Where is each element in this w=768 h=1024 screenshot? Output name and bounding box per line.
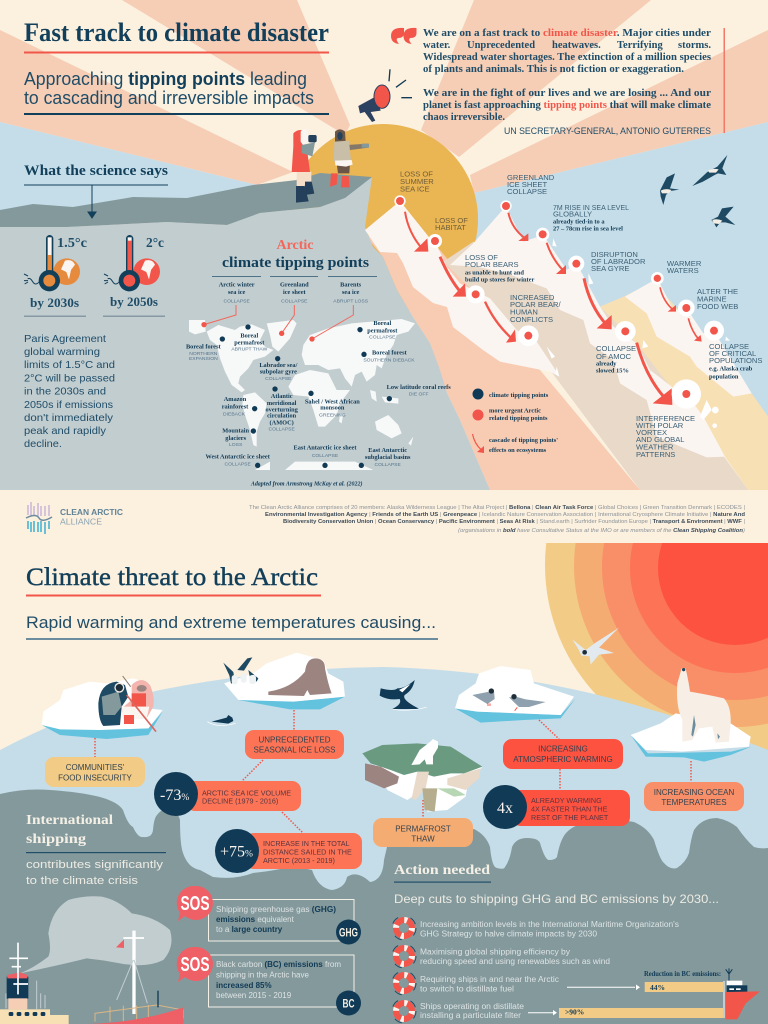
cascade labels: COLLAPSE [507,187,547,196]
cascade labels: population [709,374,739,380]
text block: Paris Agreement: peak and rapidly [24,425,107,437]
map: world map of tipping points: DIEBACK [223,412,246,418]
cascade labels: INCREASED [510,293,555,302]
callout: unprecedented seasonal ice loss: UNPRECEDENTED [258,736,331,744]
quote text: heatwaves. [552,40,601,51]
map: world map of tipping points: Sahel / West African [305,398,360,405]
statistic: -73%: -73% [160,787,189,804]
cascade labels: HABITAT [435,223,466,232]
cascade arrows and tipping point markers [394,195,730,428]
callout: increasing ocean temperatures [644,761,744,811]
text block: Paris Agreement: don't immediately [24,412,114,424]
icon: megaphone [358,69,412,122]
map: world map of tipping points: LOSS [229,442,243,448]
text block: Paris Agreement: decline. [24,438,62,450]
cascade labels: 7M RISE IN SEA LEVEL [553,203,629,212]
subtitle: to cascading and irreversible impacts [24,87,314,108]
statistic: 4x: REST OF THE PLANET [531,813,609,822]
cascade labels: INTERFERENCE [636,414,695,423]
cascade labels: build up stores for winter [465,276,535,284]
callout: SOS shipping GHG emissions: to a large country [216,925,283,934]
map: world map of tipping points: COLLAPSE [312,453,339,459]
map: world map of tipping points: Low latitude coral reefs [387,384,451,391]
legend: tipping points key: related tipping points [489,415,548,422]
map: world map of tipping points: Boreal [240,332,258,339]
callout: permafrost thaw: PERMAFROST [395,824,451,834]
map: world map of tipping points: ABRUPT THAW [231,347,268,353]
callout: unprecedented seasonal ice loss: SEASONAL ICE LOSS [254,746,335,754]
cascade labels: PATTERNS [636,450,675,459]
map: world map of tipping points: Boreal forest [186,344,222,351]
legend: tipping points key: effects on ecosystems [489,447,547,454]
cascade labels: COLLAPSE [596,344,636,353]
cascade labels [400,170,762,459]
cascade labels: WATERS [667,266,699,275]
heading: international shipping [26,813,166,887]
callout: SOS black carbon emissions: Black carbon (BC) emissions from [216,960,341,969]
chart: reduction in BC emissions: >90% [565,1008,584,1016]
cascade labels: OF CRITICAL [709,349,756,358]
legend: tipping points key: cascade of tipping points' [489,437,558,444]
map: world map of tipping points: ice sheet [283,289,307,296]
cascade labels: VORTEX [636,428,667,437]
map: world map of tipping points: (AMOC) [270,420,294,427]
text block: action list: Increasing ambition levels in the International Maritime Organization's [420,920,679,929]
heading: Arctic climate tipping points: climate tipping points [222,255,369,271]
icon: thermometer 1.5°c [24,235,87,317]
cascade labels: already tied-in to a [553,218,605,226]
map: world map of tipping points: circulation [267,413,297,420]
map: world map of tipping points: Greenland [280,282,309,289]
illustration: permafrost island with fox [362,739,482,812]
text block: Paris Agreement: in the 2030s and [24,386,106,398]
map: world map of tipping points: Atlantic [271,393,293,400]
callout: SOS black carbon emissions: increased 85% [216,981,272,990]
cascade labels: COLLAPSE [709,342,749,351]
quote text: We are on a fast track to climate disaster . Major cities under [423,28,711,39]
text block: Paris Agreement: limits of 1.5°C and [24,359,115,371]
cascade labels: GLOBALLY [553,210,592,218]
text block: Paris Agreement [24,333,115,450]
map: world map of tipping points: DIE OFF [409,392,429,398]
title: climate threat: Climate threat to the Arctic [26,564,318,591]
heading: Arctic climate tipping points [212,238,377,276]
heading: international shipping: contributes significantly [26,859,164,871]
cascade labels: 27 – 78cm rise in sea level [553,226,623,232]
subtitle [24,68,314,108]
cascade labels: POLAR BEAR/ [510,300,562,309]
callout: SOS black carbon emissions: shipping in the Arctic have [216,970,309,980]
legend: tipping points key: climate tipping points [489,392,549,399]
icon: thermometer 2°c [103,235,165,317]
text block: action list: to switch to distillate fuel [420,984,514,994]
callout: SOS shipping GHG emissions: Shipping greenhouse gas (GHG) [216,905,336,914]
quote attribution: UN SECRETARY-GENERAL, ANTONIO GUTERRES [504,126,711,137]
map: world map of tipping points: COLLAPSE [375,462,401,468]
footer band: Clean Arctic Alliance logo: CLEAN ARCTIC [60,508,123,517]
heading: what the science says: What the science says [24,163,168,179]
cascade labels: as unable to hunt and [465,270,524,276]
text block: alliance members: Environmental Investigation Agency | Friends of the Earth US | Greenpeace | Icelandic Nature Conservation Association | International Cryosphere Climate Initiative | Nature And [265,512,746,518]
map: world map of tipping points: rainforest [222,403,249,410]
statistic: +75%: DISTANCE SAILED IN THE [263,848,352,856]
map: world map of tipping points: COLLAPSE [369,335,396,341]
icon: thermometer 2°c: by 2050s [110,295,158,309]
statistic: -73%: ARCTIC SEA ICE VOLUME [202,788,291,798]
map: world map of tipping points: monsoon [320,405,345,412]
map: world map of tipping points: East Antarctic [368,447,407,454]
text block: action list [420,920,679,1020]
map: world map of tipping points: West Antarctic ice sheet [205,454,271,461]
cascade labels: LOSS OF [400,170,433,178]
text block: alliance members: Biodiversity Conservation Union | Ocean Conservancy | Pacific Environment | Seas At Risk | Stand.earth | Surfrider Foundation Europe | Transport & Environment | WWF | [283,519,745,525]
illustration: ice floe with polar bear [631,668,751,762]
text block: action list: Requiring ships in and near the Arctic [420,975,559,984]
map: world map of tipping points: Boreal forest [372,350,408,357]
callout: increasing ocean temperatures: INCREASING OCEAN [654,788,734,797]
map: world map of tipping points: COLLAPSE [225,461,251,467]
heading: international shipping: shipping [26,832,86,847]
callout: SOS black carbon emissions [177,947,361,1016]
statistic: -73% [154,772,301,816]
map: world map of tipping points: COLLAPSE [281,298,308,304]
icon: ship bow [726,968,760,1019]
callout: communities' food insecurity: COMMUNITIES' [66,763,125,772]
map: world map of tipping points: SOUTHERN DIEBACK [363,358,415,364]
heading: international shipping: to the climate crisis [26,875,139,887]
illustration: flying arctic tern [572,628,619,665]
map: world map of tipping points: permafrost [234,340,265,347]
cascade labels: ICE SHEET [507,180,547,189]
cascade labels: SUMMER [400,177,434,186]
cascade labels: OF AMOC [596,352,632,361]
legend: tipping points key: more urgent Arctic [489,408,541,414]
map: world map of tipping points: Boreal [373,320,391,327]
callout: permafrost thaw [373,800,473,847]
callout: increasing ocean temperatures: TEMPERATURES [661,798,727,807]
illustration: puffin swimming [207,715,236,725]
heading: Arctic climate tipping points: Arctic [276,238,314,253]
text block: alliance members: The Clean Arctic Alliance comprises of 20 members: Alaska Wilderness League | The Altai Project | Bellona | Clean Air Task Force | Global Choices | Green Transition Denmark | ECODES | [249,505,745,511]
callout: SOS black carbon emissions: BC [342,996,355,1010]
cascade labels: WARMER [667,259,702,268]
chart: reduction in BC emissions: 44% [650,983,665,992]
icon: sun rings [545,543,768,750]
callout: unprecedented seasonal ice loss [242,710,344,833]
map: world map of tipping points: EXPANSION [189,356,218,362]
illustration: ice floe with walrus and puffins [223,653,345,709]
heading: what the science says [24,163,168,218]
text block: action list: installing a particulate filter [420,1011,521,1020]
statistic: 4x: ALREADY WARMING [531,796,602,805]
map: world map of tipping points: Arctic winter [219,282,255,289]
cascade labels: ALTER THE [697,287,738,296]
illustration: ships with smoke plume [0,896,183,1024]
callout: SOS black carbon emissions: SOS [180,954,210,976]
map: world map of tipping points: glaciers [225,435,247,442]
icon: quotation marks [391,28,416,44]
text block: Paris Agreement: 2050s if emissions [24,399,113,411]
map: world map of tipping points: COLLAPSE [269,427,295,433]
cascade labels: slowed 15% [596,368,629,374]
map: world map of tipping points: East Antarctic ice sheet [294,445,357,452]
callout: communities' food insecurity [45,738,145,787]
statistic: 4x: 4X FASTER THAN THE [531,804,608,814]
text block: alliance members [249,505,746,534]
quote text: We are in the fight of our lives and we are losing ... And our [423,88,711,99]
map: world map of tipping points: overturning [265,406,299,413]
map: world map of tipping points: Adapted from Armstrong McKay et al. (2022) [250,480,362,487]
text block: action list: Maximising global shipping efficiency by [420,948,570,956]
cascade labels: HUMAN [510,308,538,316]
icon: thermometer 2°c: 2°c [146,236,164,251]
quote text: Unprecedented [467,40,535,51]
chart: reduction in BC emissions [528,970,725,1018]
sea background [0,667,768,1024]
text block: action list: Ships operating on distillate [420,1002,525,1011]
cascade labels: GREENLAND [507,173,555,182]
cascade labels: CONFLICTS [510,315,553,324]
map: world map of tipping points: subpolar gyre [260,368,297,375]
quote text: planet is fast approaching tipping points that will make climate [423,100,711,111]
cascade labels: POLAR BEARS [465,260,519,269]
cascade labels: WITH POLAR [636,421,684,430]
cascade labels: SEA GYRE [591,264,629,273]
map: world map of tipping points: sea ice [342,289,360,296]
quote text: Terrifying [617,40,663,51]
map: world map of tipping points: Barents [340,282,362,289]
cascade labels: already [596,360,617,368]
illustration: ice floe with terns [455,666,576,723]
quote text: water. [423,40,451,51]
map: world map of tipping points: ABRUPT LOSS [333,298,369,304]
quote text [423,28,711,123]
heading: action needed: Action needed [394,862,491,877]
quote text: of plants and animals. This is not fiction or exaggeration. [423,64,684,75]
callout: permafrost thaw: THAW [411,834,435,844]
map: world map of tipping points: permafrost [367,327,398,334]
cascade labels: LOSS OF [435,216,468,225]
cascade labels: POPULATIONS [709,356,762,365]
cascade labels: SEA ICE [400,184,430,194]
subtitle: Approaching tipping points leading [24,68,307,89]
callout: increasing atmospheric warming: INCREASING [538,744,588,754]
map: world map of tipping points: COLLAPSE [265,376,292,382]
callout: SOS shipping GHG emissions [177,886,361,944]
panel: shipping and action background [0,790,768,1024]
statistic: +75%: +75% [220,844,253,860]
map: world map of tipping points [186,282,451,487]
map: world map of tipping points: subglacial basins [365,454,411,461]
text block: alliance members: (organisations in bold have Consultative Status at the IMO or are members of the Clean Shipping Coalition ) [458,528,745,534]
chart: reduction in BC emissions: Reduction in BC emissions: [644,970,721,978]
map: world map of tipping points: Amazon [224,396,247,403]
cascade labels: MARINE [697,294,727,304]
text block: action list: reducing speed and using renewables such as wind [420,957,610,966]
cascade labels: OF LABRADOR [591,257,646,266]
icons: life rings [392,916,416,1023]
statistic: 4x: 4x [497,800,513,817]
callout: SOS shipping GHG emissions: GHG [339,926,358,940]
illustration: two Arctic figures [292,129,369,203]
callout: SOS black carbon emissions: between 2015 - 2019 [216,991,292,1000]
panel: top section background with sun rays [0,0,768,490]
icon: thermometer 1.5°c: 1.5°c [57,236,87,251]
icon: thermometer 1.5°c: by 2030s [30,296,79,310]
statistic: +75%: INCREASE IN THE TOTAL [263,839,350,848]
text block: Paris Agreement: global warming [24,346,100,358]
statistic: 4x [483,785,630,829]
map: world map of tipping points: COLLAPSE [224,298,250,304]
footer band: Clean Arctic Alliance logo [26,502,123,534]
quote text: chaos irreversible. [423,112,505,123]
illustration: whale tail [380,680,427,710]
quote text: Widespread water shortages. The extinction of a million species [423,52,711,63]
callout: SOS shipping GHG emissions: emissions equivalent [216,915,295,924]
footer band: Clean Arctic Alliance logo: ALLIANCE [60,518,102,526]
text block: Paris Agreement: 2°C will be passed [24,372,115,384]
callout: SOS shipping GHG emissions: SOS [180,893,210,915]
illustration: flying birds [660,155,735,227]
title: Fast track to climate disaster [24,18,329,47]
quote text: storms. [678,40,711,51]
map: world map of tipping points: Mountain [222,428,250,435]
subtitle: rapid warming: Rapid warming and extreme temperatures causing... [26,613,436,632]
cascade labels: DISRUPTION [591,250,638,259]
callout: increasing atmospheric warming [503,720,623,790]
legend: tipping points key [472,388,558,454]
cascade labels: WEATHER [636,442,674,452]
map: world map of tipping points: GREENING [319,413,346,419]
heading: international shipping: International [26,813,113,828]
cascade labels: LOSS OF [465,253,498,262]
statistic: +75% [215,829,362,873]
illustration: ice floe with community figures [42,676,163,739]
cascade labels: FOOD WEB [697,302,738,311]
cascade labels: AND GLOBAL [636,435,685,444]
heading: action needed: Deep cuts to shipping GHG and BC emissions by 2030... [394,892,719,906]
heading: action needed [394,862,719,906]
statistic: -73%: DECLINE (1979 - 2016) [202,796,278,806]
map: world map of tipping points: NORTHERN [189,351,218,357]
text block: action list: GHG Strategy to halve climate impacts by 2030 [420,930,598,938]
text block: Paris Agreement: Paris Agreement [24,333,106,345]
statistic: +75%: ARCTIC (2013 - 2019) [263,856,335,865]
callout: increasing atmospheric warming: ATMOSPHERIC WARMING [513,755,613,764]
map: world map of tipping points: Labrador sea/ [259,362,298,369]
map: world map of tipping points: meridional [267,400,297,407]
cascade labels: e.g. Alaska crab [709,366,753,372]
callout: communities' food insecurity: FOOD INSECURITY [58,774,133,782]
map: world map of tipping points: sea ice [228,289,246,296]
